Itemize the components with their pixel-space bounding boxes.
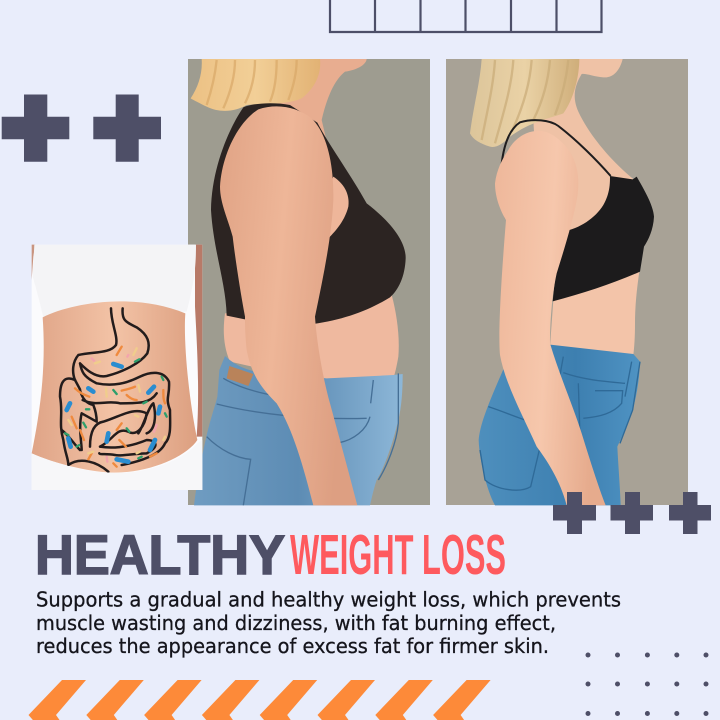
- title: WEIGHT LOSS: [290, 523, 506, 587]
- jeans label: [227, 366, 253, 386]
- inset: abdomen photo with intestines: [32, 245, 202, 490]
- neck and chin: [533, 59, 637, 237]
- panel: after photo: [446, 59, 688, 505]
- chevron arrows: [28, 680, 491, 720]
- icon: plus signs lower right: [553, 492, 711, 534]
- grid decoration at top: [330, 0, 602, 32]
- belly skin: [32, 301, 197, 473]
- arm: [220, 106, 357, 505]
- body text: muscle wasting and dizziness, with fat burning effect,: [36, 611, 556, 635]
- body text: Supports a gradual and healthy weight loss, which prevents: [36, 588, 621, 612]
- body text: reduces the appearance of excess fat for firmer skin.: [36, 634, 549, 658]
- hair: [191, 59, 320, 111]
- black top: [553, 176, 654, 301]
- straps: [501, 120, 611, 218]
- jeans: [194, 356, 403, 505]
- arm: [495, 131, 606, 505]
- underwear: [32, 440, 202, 490]
- icon: plus signs upper left: [2, 94, 161, 162]
- jeans seams: [207, 373, 398, 505]
- bacteria marks: [65, 347, 167, 467]
- title: [35, 523, 506, 587]
- dot grid: [586, 652, 708, 716]
- bra: [33, 245, 196, 317]
- torso skin: [550, 272, 639, 355]
- torso skin: [224, 295, 399, 383]
- underarm skin: [323, 177, 349, 238]
- side skin strip: [195, 245, 202, 437]
- jeans: [479, 345, 640, 505]
- body text: [36, 588, 621, 658]
- neck and face: [257, 59, 367, 190]
- hair: [470, 59, 579, 147]
- intestine outlines: [60, 308, 170, 472]
- title: HEALTHY: [35, 523, 285, 586]
- jeans seams: [480, 357, 640, 490]
- black top: [211, 103, 406, 324]
- panel: before photo: [188, 59, 430, 505]
